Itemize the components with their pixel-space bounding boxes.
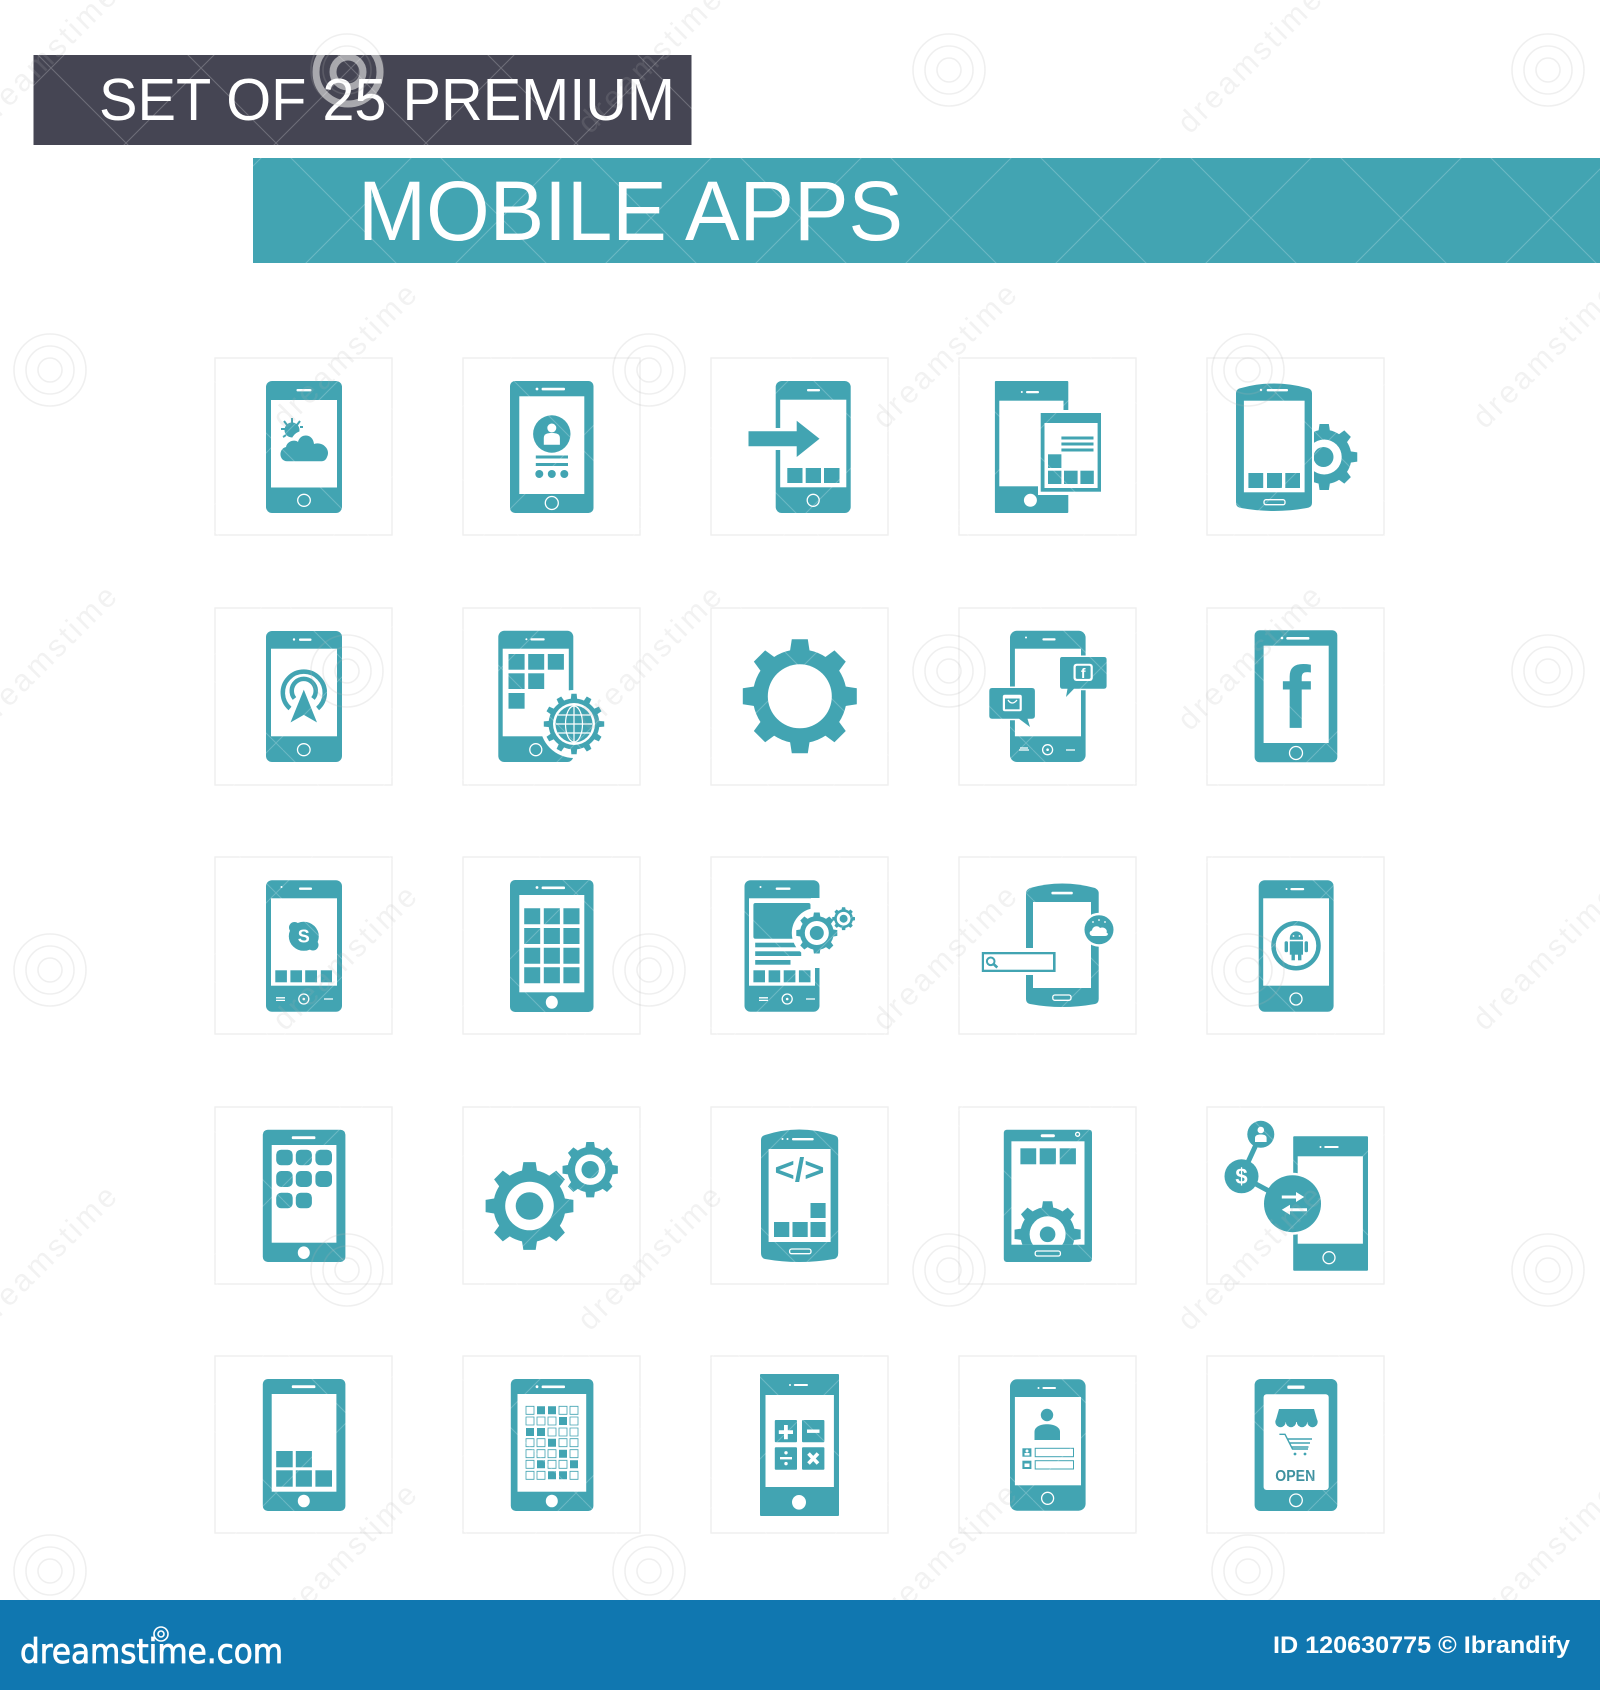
icon card: phone with rounded apps [215,1107,392,1284]
icon card: phone with social bubbles [959,608,1136,785]
footer bar [0,1600,1600,1690]
icon: phone transfer network: $ [1235,1164,1248,1189]
icon: phone calculator [760,1374,839,1516]
panel: teal title banner [253,158,1600,263]
icon: phone tile grid [510,880,594,1012]
icon card: phone with search and cloud [959,857,1136,1034]
icon card: phone with global settings [463,608,640,785]
icon: phone social bubbles [989,631,1107,762]
icon: gear behind phone [1235,382,1357,512]
icon: phone app grid and globe gear [498,631,608,762]
watermark text: dreamstime [1170,576,1331,737]
icon card: phone with weather [215,358,392,535]
icon: large gear [743,639,857,753]
footer logo: dreamstime.com: dreamstime.com [20,1632,283,1672]
icon: twin gears [486,1142,618,1250]
icon: phone code [761,1130,838,1262]
heading: set of 25 premium: SET OF 25 PREMIUM [99,67,675,133]
icon: phone skype [266,880,342,1012]
icon card: phone with tile grid [463,857,640,1034]
watermark text: dreamstime [1170,1176,1331,1337]
icon: phone arrow [748,381,851,513]
icon card: phone with facebook f [1207,608,1384,785]
watermark text: dreamstime [865,876,1026,1037]
icon: phone storefront [1255,1379,1337,1511]
label: open: OPEN [1275,1468,1315,1485]
icon card: phone with settings gear [1207,358,1384,535]
icon card: phone with skype [215,857,392,1034]
icon: tablet half gear [1004,1130,1092,1267]
icon card: settings gear [711,608,888,785]
watermark text: dreamstime [570,1176,731,1337]
watermark text: dreamstime [265,876,426,1037]
icon: phone weather [266,381,342,513]
icon: phone blocks [263,1379,345,1511]
icon card: phone with code [711,1107,888,1284]
icon card: phone calculator [711,1356,888,1533]
icon card: phone with profile [463,358,640,535]
icon: phone navigation [266,631,342,762]
icon: phone social bubbles: f [1081,665,1086,681]
icon: phone with tablet [995,381,1104,513]
icon: phone android [1259,880,1334,1012]
icon card: phone with open shop [1207,1356,1384,1533]
icon: phone pixel grid [511,1379,593,1511]
panel: dark title banner [34,55,692,145]
icon card: two gears [463,1107,640,1284]
icon: phone facebook [1255,630,1337,762]
icon: phone skype: S [298,926,310,946]
footer credit: ID 120630775 © Ibrandify [1273,1632,1571,1659]
icon: phone profile [510,381,594,513]
icon: phone transfer network [1224,1121,1368,1271]
icon: phone contact form [1010,1379,1086,1511]
icon card: phone with contact form [959,1356,1136,1533]
icon card: phone and tablet layout [959,358,1136,535]
watermark text: dreamstime [265,1474,426,1635]
icon card: phone with navigation [215,608,392,785]
icon: phone code: </> [774,1151,824,1188]
icon card: phone with transfer network [1207,1107,1384,1284]
heading: mobile apps: MOBILE APPS [358,164,903,258]
icon: phone article with gears [744,880,855,1012]
icon: phone search bar and cloud [982,884,1116,1007]
watermark text: dreamstime [865,1474,1026,1635]
icon: phone facebook: f [1281,648,1311,747]
icon card: tablet with half gear [959,1107,1136,1284]
icon: logo swirl [154,1627,168,1641]
icon card: phone with android [1207,857,1384,1034]
icon card: phone with blocks [215,1356,392,1533]
icon card: phone with incoming arrow [711,358,888,535]
icon card: phone with content and gears [711,857,888,1034]
icon card: phone with pixel grid [463,1356,640,1533]
watermark text: dreamstime [265,274,426,435]
icon: phone app icons [263,1130,345,1262]
watermark text: dreamstime [865,274,1026,435]
watermark text: dreamstime [570,576,731,737]
